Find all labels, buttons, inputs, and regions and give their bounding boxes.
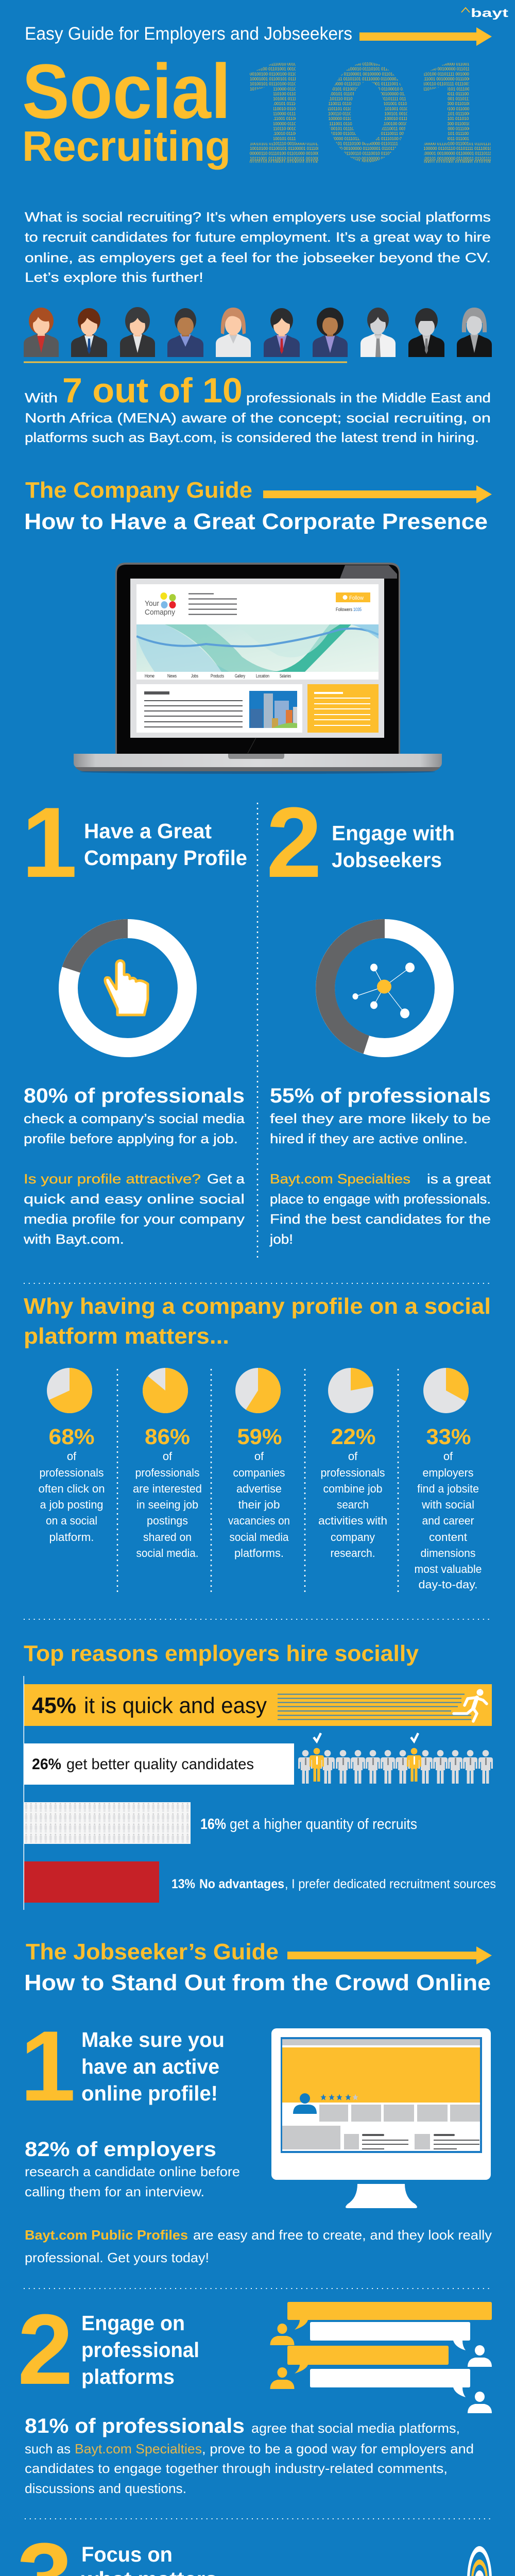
text block: 55 percent of professionals: feel they are more likely to be [270,1111,491,1126]
stat column: 33 percent: find a jobsite [417,1482,479,1495]
title: 101 in binary digits: 10010101 01101110 00100000 01101111 01110101 01110100 00100000 01101111 01100110 00100000 01110100 01100101 01101110 [250,141,492,146]
stat column: 86 percent: social media. [136,1547,199,1560]
page nav bar [136,672,379,680]
bar: 13 percent no advantages: 13% [171,1877,195,1891]
title: 101 in binary digits: 01001100 01110100 01100001 01101100 01100101 01101110 01110100 00100000 01110010 01100101 01100011 01110010 01110101 [250,92,492,96]
heading: have a great company profile: Company Profile [84,846,247,870]
page side panel [307,684,379,733]
bar: 45 percent quick and easy [24,1684,492,1726]
text block: 80 percent of professionals: profile before applying for a job. [24,1131,238,1146]
icon: person 1 [24,308,59,357]
stat column: 22 percent: combine job [323,1482,382,1495]
bar: 13 percent no advantages: , I prefer dedicated recruitment sources [285,1877,496,1891]
heading: engage on professional platforms [81,2311,199,2388]
text block: intro: online, as employers get a feel for the jobseeker beyond the CV. [25,250,491,265]
laptop screen [130,579,384,738]
title: 101 in binary digits: 10000011 01110000 01110010 01101111 01100110 01101001 01101100 01100101 00100000 01100101 01101101 01110000 01101100 [250,111,492,116]
stat column: 33 percent: employers [422,1466,474,1479]
text block: 55 percent of professionals [270,1084,491,1146]
title: 101 in binary digits: 01011000 01110010 01100101 00100000 01101101 01100101 01100100 01101001 01100001 00100000 01100100 01100001 01111001 [250,107,492,111]
stat column: 86 percent: professionals [135,1466,200,1479]
heading: how to stand out: How to Stand Out from the Crowd Online [24,1970,491,1995]
bar: 26 percent better quality [24,1743,294,1785]
page header panel: Comapny [145,608,175,617]
stat column: 59 percent: their job [238,1498,280,1511]
title: 101 in binary digits: 01110100 01101001 00101100 01110110 00100000 01100010 01110101 01101001 01101100 01100100 00100000 01101111 01101110 [250,67,492,72]
heading: engage with jobseekers: Engage with [332,821,455,845]
bar: 16 percent higher quantity: get a higher quantity of recruits [230,1816,417,1833]
pie chart: 86 percent [143,1368,188,1413]
text block: 81 percent of professionals: 81% of professionals [25,2415,245,2437]
page nav bar: Products [211,673,224,679]
title: 101 in binary digits: 10110010 01110000 01101111 01101110 01100101 01100100 00100000 01100010 01111001 01110100 01100101 01110011 01101111 [250,87,492,91]
page header panel: 1035 [353,607,362,612]
heading: why having a company profile [24,1294,491,1349]
heading: how to have a great corporate presence: How to Have a Great Corporate Presence [24,509,488,534]
stat column: 86 percent: shared on [143,1531,192,1544]
icon: person 9 [408,308,444,357]
title: 101 in binary digits: 10001001 01100101 01110000 01100011 01101111 01101101 01110000 01100001 01101110 01111001 00100000 01110000 01110010 [250,77,492,81]
heading: have a great company profile [84,819,247,870]
icon: person 10 [457,308,492,357]
page nav bar: News [167,673,177,679]
page header panel: Follow [349,595,364,601]
stat column: 86 percent: 86% [145,1425,190,1449]
text block: 81 percent of professionals: agree that social media platforms, [251,2420,460,2436]
title: 101 in binary digits: 10100101 01110100 01100001 01101100 00100000 01110111 01100001 01111001 00100000 01100110 01101111 01110010 00100000 [250,82,492,87]
heading: focus on what matters most: Focus on [81,2543,173,2566]
number: 2: 2 [18,2294,73,2405]
rating stars [320,2094,358,2100]
donut chart: 55 percent with network icon [325,928,444,1048]
text block: is your profile attractive: quick and easy online social [24,1191,245,1207]
text block: 7 out of 10: platforms such as Bayt.com, is considered the latest trend in hiring. [25,430,479,445]
text block: 81 percent of professionals: such as [25,2441,71,2456]
arrow: subtitle [359,27,492,46]
title: 101 in binary digits: 10010100 01100101 01100001 01110011 01110100 00100000 01100001 01101110 01100100 00100000 01101110 01101111 01110010 [250,146,492,151]
text block: bayt specialties: place to engage with professionals. [270,1191,491,1207]
stat column: 86 percent: of [163,1450,173,1463]
icon: person 7 [313,308,348,357]
stat column: 22 percent: search [337,1498,369,1511]
number: 1: 1 [22,787,77,899]
page content panel [136,684,302,733]
pie chart: 68 percent [47,1368,92,1413]
title: 101 in binary digits: 10111001 01110010 01100101 00100000 01101111 01100110 00100000 01110100 01101000 01100101 00100000 01100011 01101111 [250,156,492,161]
illustration: monitor with profile [271,2028,491,2208]
stat column: 68 percent: professionals [39,1466,104,1479]
laptop base [74,754,442,774]
number: 2: 2 [266,787,322,899]
stat column: 86 percent [133,1368,202,1560]
donut chart: 80 percent with hand icon [68,928,187,1048]
icon: target with arrow [246,2546,492,2576]
title: 101 in binary digits: 01101110 01100011 01100101 01110000 01110100 00111011 00100000 01110011 01101111 01100011 01101001 01100001 01101100 [250,160,492,164]
stat column: 33 percent: most valuable [414,1563,482,1575]
text block: 82 percent of employers: calling them for an interview. [25,2184,204,2199]
stat column: 22 percent: company [331,1531,375,1544]
bar: 13 percent no advantages [24,1861,496,1903]
title: 101 in binary digits: 01101111 01111001 01100101 01110010 00100000 01101010 01101111 01100010 01110011 01100101 01100101 01101011 01100101 [250,116,492,121]
bar chart: top reasons [24,1676,496,1910]
icon: runner [454,1689,487,1721]
page nav bar: Salaries [280,673,291,679]
illustration: speech bubbles conversation [270,2302,492,2413]
text block: intro [25,209,491,285]
stat column: 59 percent: advertise [236,1482,282,1495]
text block: 80 percent of professionals [24,1084,245,1146]
page nav bar: Gallery [235,673,245,679]
text block: bayt specialties: is a great [427,1171,491,1187]
stat column: 22 percent: of [348,1450,358,1463]
text block: 7 out of 10 [25,371,491,445]
text block: 55 percent of professionals: 55% of professionals [270,1084,491,1107]
text block: is your profile attractive: media profile for your company [24,1211,245,1227]
icons: row of ten professionals [24,307,492,357]
page banner waves [136,624,379,672]
bar: 45 percent quick and easy: 45% [32,1693,76,1718]
icon: person 6 [264,308,300,357]
stat column: 22 percent: activities with [318,1514,387,1527]
bar: 16 percent higher quantity: 16% [200,1816,226,1833]
text block: 7 out of 10: North Africa (MENA) aware of the concept; social recruiting, on [25,410,491,426]
divider: vertical dotted [257,803,258,1258]
icon: pointing hand [105,960,148,1015]
stat column: 68 percent [38,1368,105,1544]
stat column: 59 percent: of [254,1450,264,1463]
icon: person right [468,2345,492,2367]
text block: bayt specialties: Find the best candidates for the [270,1211,491,1227]
page header panel: Followers [336,607,352,612]
text block: bayt specialties: Bayt.com Specialties [270,1171,410,1187]
arrow: company guide [263,485,492,503]
stat column: 22 percent [318,1368,387,1560]
stat column: 68 percent: a job posting [40,1498,103,1511]
stat column: 59 percent: vacancies on [228,1514,290,1527]
illustration: laptop with company page [74,563,442,774]
icon: row of candidates with two selected [298,1733,493,1784]
stat column: 86 percent: in seeing job [136,1498,198,1511]
stat column: 33 percent [414,1368,482,1591]
title: 101 in binary digits: 11000001 01110110 00101110 01101100 01100101 01110100 00100111 01110011 00100000 01100101 01111000 01110000 01101100 [250,127,492,131]
text block: bayt public profiles: Bayt.com Public Profiles [25,2227,188,2243]
bar: 13 percent no advantages: No advantages [199,1877,284,1891]
title: 101 in binary digits: 00100100 01100100 01100101 01101110 01100010 01100001 00100000 01101001 01101110 01110100 01101111 00100000 01110011 [250,72,492,76]
text block: is your profile attractive: Get a [207,1171,245,1187]
profile avatar [293,2093,317,2114]
icon: person 4 [167,308,203,357]
heading: engage on professional platforms: professional [81,2338,199,2362]
bar: 26 percent better quality: 26% [32,1756,61,1773]
heading: the jobseekers guide: The Jobseeker’s Guide [26,1939,279,1964]
heading: make sure you have an active online profile: Make sure you [81,2028,225,2052]
bar: 45 percent quick and easy: it is quick and easy [84,1693,267,1718]
stat column: 33 percent: dimensions [420,1547,476,1560]
text block: 81 percent of professionals: candidates to engage together through industry-related comments, [25,2461,448,2476]
bar: 16 percent higher quantity [24,1802,417,1844]
heading: make sure you have an active online profile: have an active [81,2055,219,2078]
arrow: jobseekers guide [287,1946,492,1964]
icon: person 8 [360,308,396,357]
stat column: 59 percent: companies [233,1466,285,1479]
heading: engage with jobseekers [332,821,455,872]
text block: 80 percent of professionals: 80% of professionals [24,1084,245,1107]
page nav bar: Home [145,673,154,679]
bubble: yellow third [287,2346,449,2374]
text block: 82 percent of employers: research a candidate online before [25,2164,240,2179]
text block: 81 percent of professionals: , prove to be a good way for employers and [202,2441,474,2456]
page nav bar: Location [256,673,269,679]
icon: person left lower [270,2367,295,2389]
icon: person 3 [120,307,155,357]
icon: network [352,962,415,1018]
heading: engage on professional platforms: Engage on [81,2311,185,2335]
stat column: 68 percent: on a social [46,1514,97,1527]
stat column: 33 percent: content [429,1531,467,1544]
title: social recruiting: Recruiting [22,122,231,170]
stat column: 68 percent: of [67,1450,77,1463]
heading: focus on what matters most [81,2543,217,2576]
heading: the company guide: The Company Guide [25,478,252,503]
heading: engage on professional platforms: platforms [81,2365,175,2388]
text block: is your profile attractive [23,1171,245,1247]
bubble: white fourth [310,2369,470,2397]
bubble: yellow top [287,2302,492,2330]
heading: why having a company profile: Why having a company profile on a social [24,1294,491,1319]
text block: 7 out of 10: 7 out of 10 [62,371,243,410]
title: 101 in binary digits: 00101101 01101001 01110100 01101001 01101110 01100111 00100000 01101111 01101110 01101100 01101001 01101110 01100101 [250,97,492,101]
text block: bayt public profiles: are easy and free to create, and they look really [193,2227,492,2243]
text block: 7 out of 10: professionals in the Middle East and [246,390,491,405]
pie chart: 33 percent [423,1368,469,1413]
text block: is your profile attractive: with Bayt.com. [23,1231,124,1247]
bar: 26 percent better quality: get better quality candidates [66,1756,254,1773]
stat column: 59 percent: 59% [237,1425,282,1449]
stat column: 33 percent: 33% [426,1425,471,1449]
icon: person 2 [71,308,107,357]
title: 101 in binary digits: 01101000 01100101 01110010 00100001 00100000 01110111 01101001 01110100 01101000 00100000 01110011 01100101 01110110 [250,137,492,141]
text block: intro: Let’s explore this further! [25,269,203,285]
stat column: 33 percent: with social [421,1498,474,1511]
heading: engage with jobseekers: Jobseekers [332,848,442,872]
heading: why having a company profile: platform matters... [24,1324,229,1349]
heading: make sure you have an active online profile: online profile! [81,2081,218,2105]
icon: person 5 [216,308,251,357]
stat column: 22 percent: research. [331,1547,375,1560]
logo: bayt top right [461,6,509,20]
stat column: 33 percent: day-to-day. [418,1578,478,1591]
text block: 80 percent of professionals: check a company’s social media [24,1111,245,1126]
title: 101 in binary digits: 11101110 01100101 01110111 00100000 01110011 01101111 01100011 01101001 01100001 01101100 00100000 01101000 01101001 [250,101,492,106]
title: social recruiting: Social [22,48,231,134]
text block: bayt specialties: job! [269,1231,293,1247]
text block: bayt specialties [269,1171,491,1247]
text block: 81 percent of professionals [25,2415,474,2496]
pie chart: 59 percent [235,1368,281,1413]
icon: person left [270,2324,295,2345]
number: 1: 1 [20,2010,76,2122]
stat column: 33 percent: and career [422,1514,474,1527]
text block: 81 percent of professionals: Bayt.com Specialties [75,2441,202,2456]
stat column: 22 percent: professionals [320,1466,385,1479]
heading: make sure you have an active online profile [81,2028,225,2105]
title: 101 in binary digits: 00000110 01110100 01101000 00100000 01100001 01100110 01110010 01101001 01100011 01100001 00100000 01100001 01110111 [250,151,492,156]
text block: bayt public profiles: professional. Get yours today! [25,2250,209,2265]
page header panel [136,584,379,624]
stat column: 59 percent: platforms. [234,1547,284,1560]
stat column: 68 percent: often click on [38,1482,105,1495]
text block: intro: What is social recruiting? It’s when employers use social platforms [25,209,491,225]
title: 101 in binary digits: 01101111 01110010 01100101 00100000 01110100 01101000 01101001 01110011 00100000 01100110 01110101 01110010 01110100 [250,131,492,136]
stat column: 22 percent: 22% [331,1425,376,1449]
stat column: 86 percent: postings [147,1514,188,1527]
stat column: 86 percent: are interested [133,1482,202,1495]
icon: person right lower [468,2392,492,2413]
text block: bayt public profiles [25,2227,492,2265]
pie chart: 22 percent [328,1368,373,1413]
stat column: 33 percent: of [443,1450,453,1463]
title: 101 in binary digits: 01100101 01110010 00100000 01110100 01101111 00100000 01100101 01100001 01110011 01111001 00100000 01100111 01110101 [250,62,492,66]
page header panel: Your [145,599,159,608]
text block: 82 percent of employers: 82% of employers [25,2138,216,2161]
text block: 7 out of 10: With [25,390,58,405]
stat column: 68 percent: platform. [49,1531,94,1544]
stat column: 59 percent [228,1368,290,1560]
title: 101 in binary digits [250,62,492,164]
bubble: white second [310,2322,470,2350]
stat column: 68 percent: 68% [48,1425,95,1449]
text block: 81 percent of professionals: discussions and questions. [25,2481,186,2496]
stat column: 59 percent: social media [230,1531,289,1544]
title: social recruiting [22,48,231,170]
heading: have a great company profile: Have a Great [84,819,212,843]
page nav bar: Jobs [191,673,198,679]
text block: intro: to recruit candidates for future employment. It’s a great way to hire [25,229,491,245]
logo: bayt top right: bayt [471,6,509,20]
title: 101 in binary digits: 01110010 00100000 01100010 01100101 01111001 01101111 01101110 01100100 00100000 01110100 01101000 01100101 00100000 [250,122,492,126]
subtitle: easy guide: Easy Guide for Employers and Jobseekers [25,24,352,44]
heading: top reasons employers hire socially: Top reasons employers hire socially [24,1641,419,1666]
text block: 82 percent of employers [25,2138,240,2199]
text block: is your profile attractive: Is your profile attractive? [24,1171,201,1187]
text block: 55 percent of professionals: hired if they are active online. [270,1131,468,1146]
